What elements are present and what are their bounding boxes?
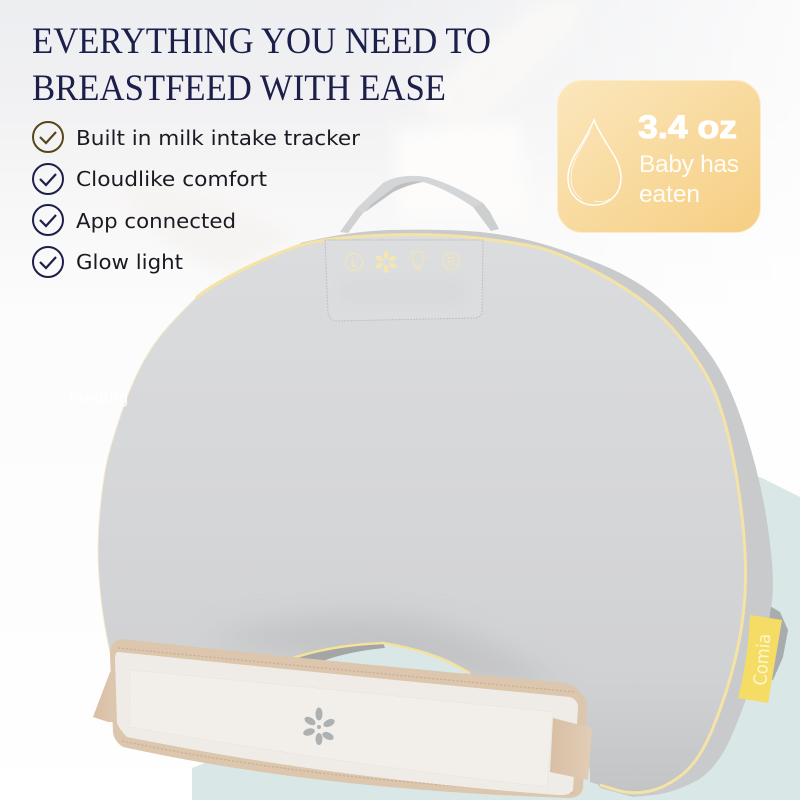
icon: light button bbox=[408, 248, 428, 270]
yellow brand tag bbox=[738, 615, 782, 703]
strap border stitching bbox=[118, 648, 575, 793]
notch piping bbox=[287, 643, 470, 673]
title bbox=[32, 21, 491, 109]
icon: L button: L bbox=[351, 256, 358, 270]
pillow top handle bbox=[340, 176, 499, 233]
stat caption: eaten bbox=[639, 181, 700, 208]
strap right webbing bbox=[550, 718, 592, 780]
feature: app connected bbox=[33, 205, 236, 235]
feature: app connected: App connected bbox=[76, 209, 236, 233]
carry strap bbox=[93, 639, 592, 798]
yellow brand tag: Comia bbox=[750, 633, 776, 686]
stat caption bbox=[639, 151, 739, 208]
strap cream pad bbox=[115, 652, 578, 795]
feature: glow light: Glow light bbox=[76, 250, 183, 274]
strap stitched panel bbox=[130, 670, 553, 787]
edge piping bbox=[98, 298, 196, 653]
control pocket bbox=[325, 240, 483, 321]
icon: flower button bbox=[375, 251, 397, 273]
stat card: milk eaten bbox=[558, 80, 760, 232]
icon: milk drop bbox=[568, 120, 621, 205]
stat caption: Baby has bbox=[639, 151, 739, 178]
lower pillow shading bbox=[200, 616, 560, 690]
title: BREASTFEED WITH EASE bbox=[32, 68, 446, 109]
mint backdrop bbox=[192, 470, 800, 800]
pillow top face bbox=[98, 235, 746, 793]
icon: R button bbox=[442, 252, 460, 270]
stat value: 3.4 oz bbox=[638, 109, 737, 145]
feature: glow light bbox=[33, 247, 183, 277]
product: feeding pillow bbox=[93, 176, 788, 798]
strap tan border bbox=[110, 639, 587, 798]
feature: milk intake tracker: Built in milk intake tracker bbox=[76, 126, 361, 150]
centre notch bbox=[287, 643, 470, 680]
feature: milk intake tracker bbox=[33, 122, 361, 152]
faint overlay word: feeding bbox=[69, 390, 128, 407]
feature: cloudlike comfort: Cloudlike comfort bbox=[76, 167, 267, 191]
feature: cloudlike comfort bbox=[33, 164, 267, 194]
icon: strap flower logo bbox=[302, 708, 336, 745]
pillow back strap loop bbox=[760, 606, 788, 680]
icon: L button bbox=[346, 254, 362, 270]
title: EVERYTHING YOU NEED TO bbox=[32, 21, 491, 62]
icon: R button: R bbox=[447, 254, 456, 268]
pillow side band bbox=[300, 230, 773, 797]
feature list bbox=[33, 122, 361, 277]
strap left webbing bbox=[93, 672, 128, 722]
